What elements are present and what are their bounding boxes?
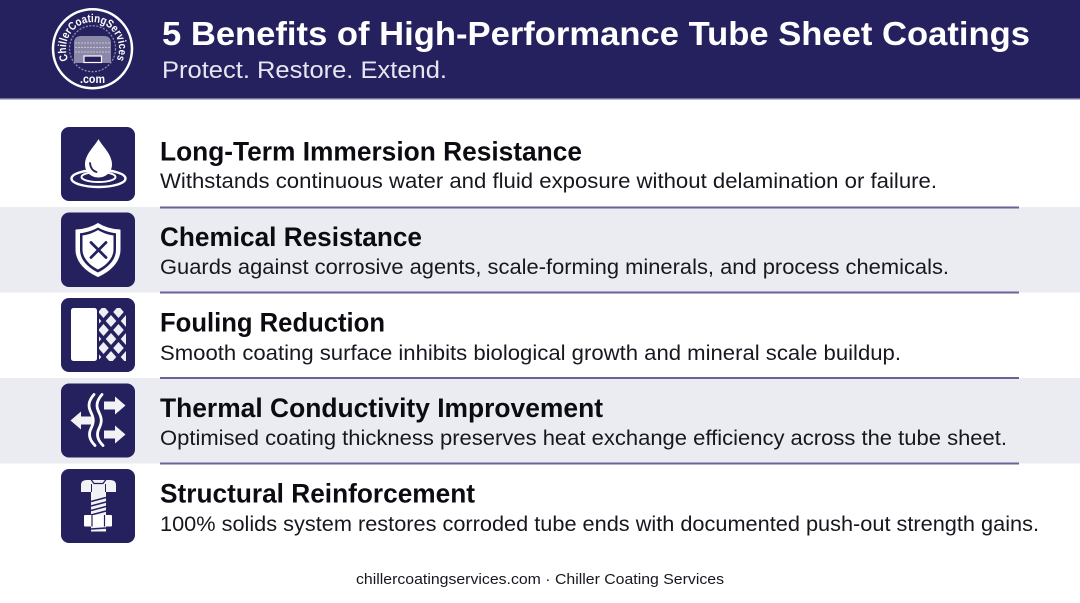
- icon: smooth surface beside fouled lattice: [61, 298, 135, 372]
- footer: chillercoatingservices.com · Chiller Coating Services: [356, 571, 724, 588]
- panel: Thermal Conductivity Improvement: [61, 384, 1007, 458]
- icon: shield with X: [61, 212, 135, 287]
- panel: Structural Reinforcement: [61, 469, 1039, 543]
- panel: Long-Term Immersion Resistance: [61, 127, 937, 201]
- header banner: [0, 0, 1080, 100]
- panel: Fouling Reduction: [61, 298, 901, 372]
- title: 5 Benefits of High-Performance Tube Sheet Coatings: [162, 15, 1030, 52]
- subtitle: Protect. Restore. Extend.: [162, 57, 447, 84]
- heading: Thermal Conductivity Improvement: [160, 393, 603, 423]
- description: Withstands continuous water and fluid exposure without delamination or failure.: [160, 170, 937, 193]
- heading: Fouling Reduction: [160, 308, 385, 338]
- panel: Chemical Resistance: [61, 212, 949, 287]
- heading: Structural Reinforcement: [160, 478, 475, 508]
- description: Guards against corrosive agents, scale-forming minerals, and process chemicals.: [160, 256, 949, 279]
- icon: Chiller Coating Services logo: ChillerCoatingServices: [58, 14, 126, 62]
- icon: water drop with ripples: [61, 127, 135, 201]
- icon: Chiller Coating Services logo: .com: [80, 72, 105, 86]
- description: Optimised coating thickness preserves heat exchange efficiency across the tube sheet.: [160, 427, 1007, 450]
- icon: heat waves and arrows: [61, 384, 135, 458]
- heading: Chemical Resistance: [160, 222, 422, 252]
- heading: Long-Term Immersion Resistance: [160, 136, 582, 166]
- description: 100% solids system restores corroded tube ends with documented push-out strength gains.: [160, 513, 1039, 536]
- icon: bolt and nut: [61, 469, 135, 543]
- description: Smooth coating surface inhibits biological growth and mineral scale buildup.: [160, 342, 901, 365]
- icon: Chiller Coating Services logo: [52, 8, 134, 90]
